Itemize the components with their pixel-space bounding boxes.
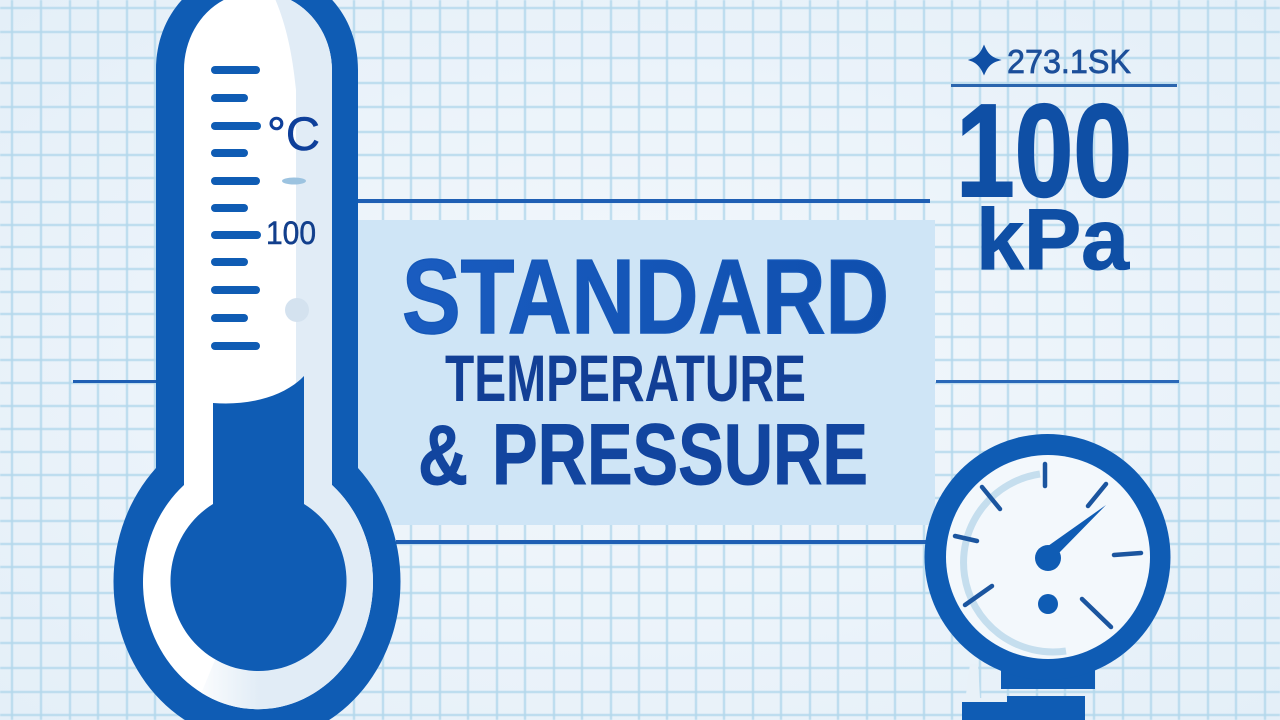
title line: TEMPERATURE: TEMPERATURE (445, 341, 806, 415)
word: PRESSURE: PRESSURE (492, 407, 868, 503)
faint mark (282, 178, 306, 184)
thermometer glass interior (143, 0, 373, 709)
faint bubble (285, 298, 309, 322)
title panel (356, 220, 935, 525)
needle hub (1035, 545, 1061, 571)
thermometer body outline (113, 0, 401, 720)
scale ticks (211, 66, 261, 350)
dial ticks (955, 464, 1141, 627)
title line: STANDARD: STANDARD (402, 238, 889, 356)
value divider (951, 84, 1177, 87)
dial arc (964, 474, 1066, 652)
temperature value: 273.1SK (1007, 43, 1131, 80)
gauge fitting: small pipe (965, 664, 1007, 702)
temperature value row (971, 43, 1131, 80)
connector line: right (936, 380, 1179, 383)
mercury column and bulb (170, 376, 346, 671)
pressure gauge (924, 434, 1170, 720)
icon: diamond (971, 47, 998, 73)
gauge neck (1001, 660, 1095, 689)
title (402, 238, 889, 503)
glass shading (201, 0, 373, 710)
connector line: lower (396, 540, 928, 544)
lower pivot dot (1038, 594, 1058, 614)
scale label: 100: 100 (266, 215, 316, 251)
thermometer (113, 0, 401, 720)
pressure unit: kPa (976, 192, 1130, 288)
needle (1048, 505, 1106, 554)
gauge bezel (924, 434, 1170, 680)
gauge base (962, 696, 1085, 720)
pressure value: 100 (956, 77, 1132, 224)
gauge dial (946, 455, 1150, 659)
ampersand: & (418, 408, 468, 502)
connector line: upper (356, 199, 930, 203)
connector line: left (73, 380, 157, 383)
unit label: degrees Celsius: °C (267, 107, 320, 160)
title line: & PRESSURE (418, 407, 868, 503)
